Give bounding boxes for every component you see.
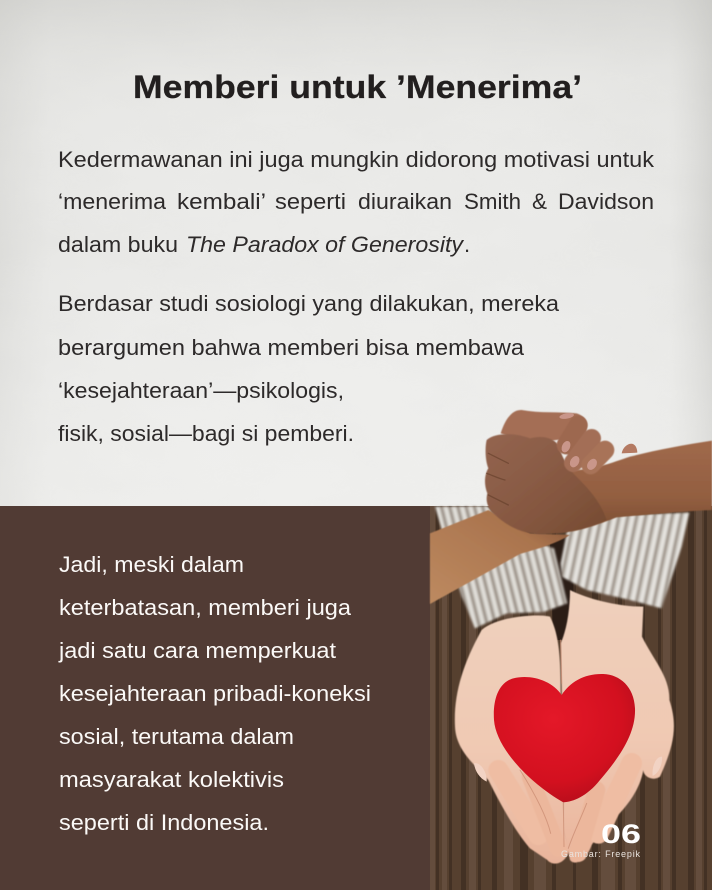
shadow between sleeves [550, 533, 573, 640]
heart [494, 674, 635, 802]
dark arm and fist [485, 434, 712, 534]
knuckle lines [487, 453, 508, 505]
text block: second paragraph: fisik, sosial—bagi si pemberi. [58, 421, 354, 446]
text block: second paragraph: berargumen bahwa memberi bisa membawa [58, 335, 525, 360]
text block: first paragraph: . [464, 232, 470, 257]
image credit: Gambar: Freepik [561, 849, 640, 859]
text block: first paragraph: The Paradox of Generosity [186, 232, 465, 257]
text block: first paragraph: Smith [464, 189, 521, 214]
title: Memberi untuk ’Menerima’ [133, 69, 582, 105]
text block: conclusion: masyarakat kolektivis [59, 767, 284, 792]
text block: conclusion [58, 552, 371, 835]
back of clasped hand [501, 410, 587, 443]
text block: first paragraph: Kedermawanan ini juga mungkin didorong motivasi untuk [58, 147, 655, 172]
text block: first paragraph: diuraikan [358, 189, 452, 214]
text block: first paragraph: & [532, 189, 547, 214]
page number: 06 [601, 819, 641, 849]
text block: conclusion: kesejahteraan pribadi-koneksi [59, 681, 371, 706]
text block: first paragraph: seperti [275, 189, 346, 214]
text block: conclusion: keterbatasan, memberi juga [59, 595, 352, 620]
open left hand [455, 615, 569, 864]
text block: second paragraph: ‘kesejahteraan’—psikologis, [58, 378, 344, 403]
text block: conclusion: sosial, terutama dalam [59, 724, 294, 749]
right sleeve [561, 513, 689, 608]
gripping fingers [566, 425, 605, 465]
nails [559, 412, 599, 472]
panel: brown conclusion [0, 506, 430, 890]
left sleeve [435, 506, 567, 628]
text block: first paragraph [58, 147, 655, 257]
open right hand [561, 590, 674, 863]
left arm [430, 510, 570, 604]
text block: second paragraph [58, 291, 560, 446]
text block: first paragraph: kembali’ [177, 189, 266, 214]
text block: conclusion: Jadi, meski dalam [59, 552, 244, 577]
text block: first paragraph: dalam buku [58, 232, 178, 257]
text block: first paragraph: Davidson [558, 189, 654, 214]
text block: first paragraph: ‘menerima [58, 189, 167, 214]
text block: conclusion: seperti di Indonesia. [59, 810, 269, 835]
finger creases and nails [520, 640, 587, 848]
text block: second paragraph: Berdasar studi sosiologi yang dilakukan, mereka [58, 291, 560, 316]
illustration: hands and heart [430, 410, 712, 864]
text block: conclusion: jadi satu cara memperkuat [58, 638, 336, 663]
photo: wooden table [430, 506, 712, 890]
